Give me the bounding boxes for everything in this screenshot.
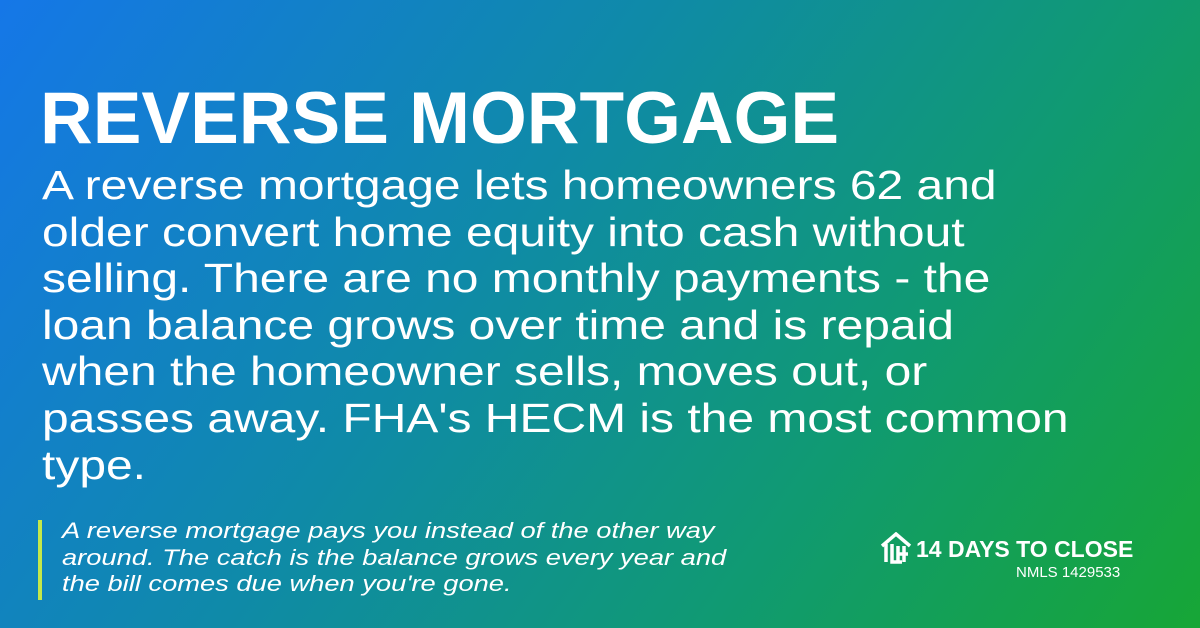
text block: description: selling. There are no monthly payments - the	[42, 255, 990, 301]
callout: quote	[38, 520, 598, 600]
logo	[880, 532, 1133, 581]
callout: quote: A reverse mortgage pays you instead of the other way	[62, 518, 715, 543]
callout: quote: around. The catch is the balance grows every year and	[62, 544, 726, 570]
nmls: NMLS 1429533	[1016, 564, 1120, 581]
icon: house	[880, 532, 912, 564]
text block: description: when the homeowner sells, moves out, or	[42, 348, 927, 394]
callout: quote: the bill comes due when you're gone.	[62, 571, 512, 596]
text block: description: older convert home equity into cash without	[42, 209, 965, 255]
title: REVERSE MORTGAGE	[40, 78, 839, 159]
text block: description	[42, 162, 1069, 488]
text block: description: loan balance grows over time and is repaid	[42, 302, 954, 348]
text block: description: passes away. FHA's HECM is the most common	[42, 395, 1069, 441]
text block: description: A reverse mortgage lets homeowners 62 and	[42, 162, 997, 208]
text block: description: type.	[42, 442, 146, 488]
brand name: 14 DAYS TO CLOSE	[916, 536, 1133, 562]
